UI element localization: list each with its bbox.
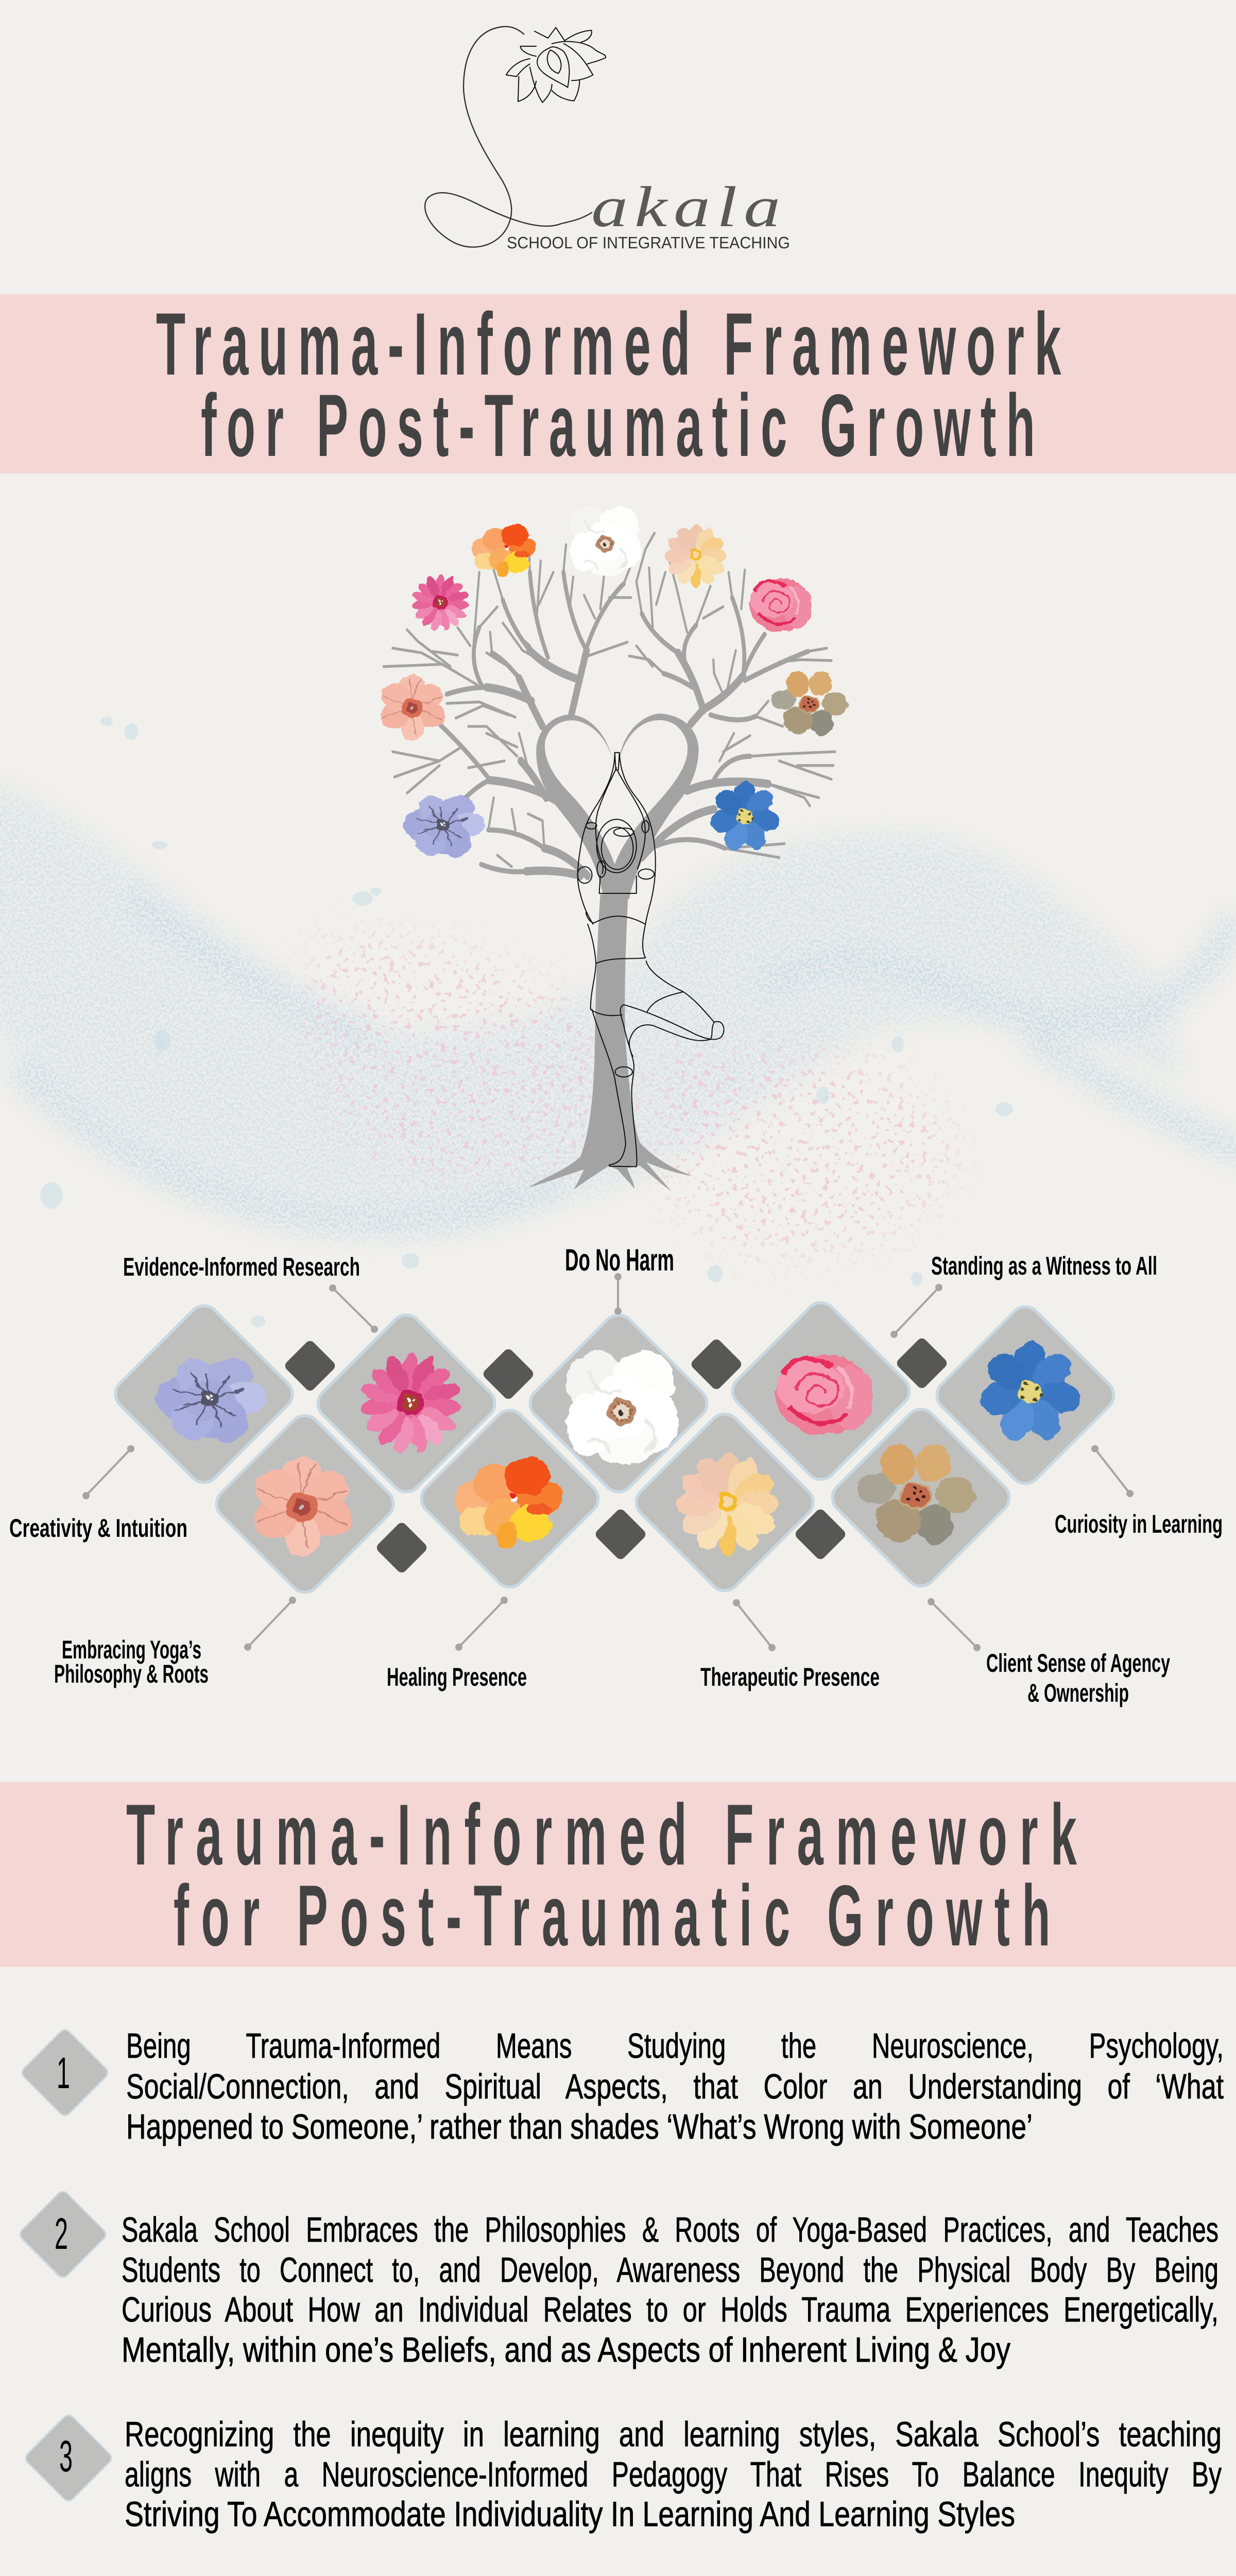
heading band: top title bbox=[0, 294, 1236, 475]
flower: rose bbox=[749, 578, 812, 632]
number badge 3 bbox=[23, 2413, 114, 2503]
point 3 text bbox=[125, 2415, 1222, 2534]
number badge 1 bbox=[20, 2027, 110, 2118]
point 2 text: Mentally, within one’s Beliefs, and as Aspects of Inherent Living & Joy bbox=[122, 2330, 1010, 2369]
flower: pink bbox=[411, 574, 470, 632]
diamond labels: Healing Presence bbox=[387, 1663, 527, 1691]
number badge 3: 3 bbox=[59, 2432, 73, 2481]
flower diamonds grid bbox=[109, 1296, 1120, 1599]
point 1 bbox=[20, 2026, 1224, 2146]
point 2 text bbox=[122, 2210, 1218, 2369]
logo wordmark: akala bbox=[591, 175, 787, 239]
diamond labels bbox=[9, 1243, 1223, 1707]
tree bbox=[384, 533, 835, 1192]
flower: blue bbox=[708, 781, 781, 854]
flower: orange bbox=[472, 524, 536, 577]
diamond: client agency bbox=[826, 1403, 1016, 1592]
watercolor background wash bbox=[0, 717, 1236, 1327]
heart lobes bbox=[536, 714, 698, 899]
point 3 bbox=[23, 2413, 1222, 2534]
flower: peach bbox=[665, 524, 727, 588]
diamond labels: Do No Harm bbox=[565, 1243, 674, 1277]
logo stem line forming the S bbox=[425, 27, 592, 247]
diamond labels: Embracing Yoga’s bbox=[62, 1635, 201, 1664]
diamond: therapeutic presence bbox=[630, 1408, 819, 1597]
yoga figure line drawing bbox=[577, 753, 724, 1166]
diamond: evidence bbox=[312, 1309, 501, 1498]
diamond: curiosity bbox=[931, 1300, 1120, 1490]
diamond labels: Philosophy & Roots bbox=[54, 1659, 209, 1688]
logo bbox=[425, 27, 790, 252]
branches thick bbox=[487, 651, 768, 876]
point 1 text bbox=[126, 2026, 1224, 2146]
number badge 1: 1 bbox=[57, 2048, 70, 2098]
flower: salmon bbox=[375, 674, 449, 741]
diamond: witness bbox=[726, 1296, 916, 1486]
logo tagline: SCHOOL OF INTEGRATIVE TEACHING bbox=[507, 233, 790, 252]
small dark diamonds bbox=[283, 1336, 949, 1574]
diamond: healing presence bbox=[415, 1404, 605, 1594]
flower: tan bbox=[771, 671, 848, 736]
branches thin bbox=[384, 533, 835, 867]
point 3 text: Striving To Accommodate Individuality In Learning And Learning Styles bbox=[125, 2495, 1015, 2534]
number badge 2 bbox=[18, 2189, 108, 2280]
point 2 bbox=[18, 2189, 1218, 2369]
diamond: do no harm bbox=[524, 1309, 713, 1498]
diamond labels: Therapeutic Presence bbox=[700, 1663, 880, 1691]
diamond: yoga philosophy bbox=[210, 1409, 400, 1599]
diamond labels: & Ownership bbox=[1027, 1679, 1129, 1707]
logo flower bbox=[506, 27, 606, 103]
trunk and roots bbox=[528, 894, 692, 1192]
flower: white bbox=[570, 506, 641, 576]
flower: lavender bbox=[403, 795, 485, 858]
diamond labels: Creativity & Intuition bbox=[9, 1514, 187, 1543]
diamond: creativity bbox=[109, 1299, 299, 1489]
diamond labels: Evidence-Informed Research bbox=[123, 1252, 360, 1281]
tree flowers bbox=[375, 506, 848, 858]
heading band: second title bbox=[0, 1782, 1236, 1967]
number badge 2: 2 bbox=[55, 2209, 68, 2259]
connector lines bbox=[83, 1274, 1132, 1650]
branches medium bbox=[439, 572, 808, 872]
